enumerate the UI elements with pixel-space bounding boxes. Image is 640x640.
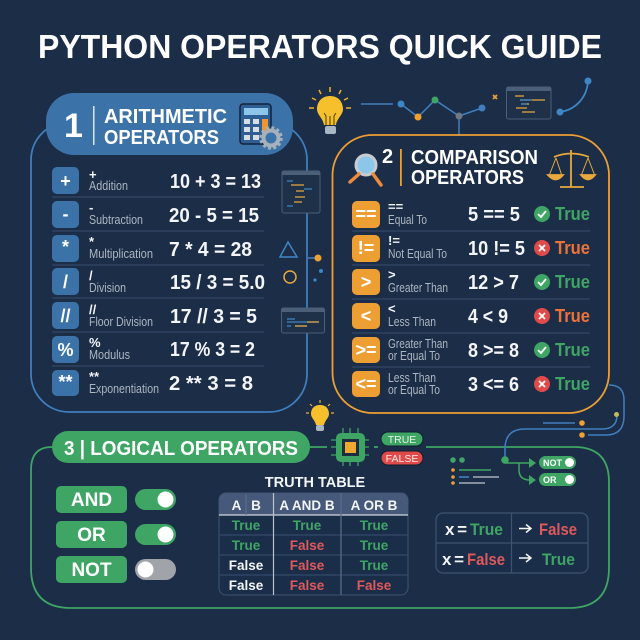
row: multiplication [52, 231, 264, 262]
row: exponentiation [52, 366, 264, 396]
row: modulus: Modulus [89, 347, 130, 362]
row: multiplication: Multiplication [89, 246, 153, 261]
arithmetic header [46, 93, 293, 155]
row: not equal: True [555, 238, 590, 258]
truth table: False [229, 578, 264, 593]
truth table: A OR B [351, 498, 398, 513]
row: less than: True [555, 306, 590, 326]
row: not equal [352, 231, 590, 262]
decorative code lines and circuit [450, 385, 624, 485]
toggle pill: NOT: NOT [543, 458, 562, 468]
row: addition: + [60, 171, 71, 191]
toggle pill: NOT [539, 456, 576, 469]
row: less than [352, 299, 590, 329]
row: less or equal [352, 367, 590, 397]
row: equal: == [388, 199, 404, 214]
row: exponentiation: Exponentiation [89, 381, 159, 396]
row: modulus: 17 % 3 = 2 [170, 339, 255, 361]
decorative shapes [280, 242, 323, 283]
truth table: A AND B [279, 498, 335, 513]
row: floor division [52, 298, 264, 329]
toggle: NOT [135, 559, 176, 580]
row: not equal: != [358, 238, 374, 258]
icon: code window top [506, 87, 551, 119]
row: addition: Addition [89, 178, 128, 193]
row: greater or equal: 8 >= 8 [468, 340, 519, 362]
row: division: / [89, 268, 93, 283]
toggle pill: OR: OR [543, 475, 557, 485]
row: greater than [352, 265, 590, 295]
row: not equal: Not Equal To [388, 246, 447, 261]
row: less or equal: or Equal To [388, 382, 440, 397]
row: greater or equal: or Equal To [388, 348, 440, 363]
title: PYTHON OPERATORS QUICK GUIDE [38, 28, 602, 65]
truth table: True [232, 538, 261, 553]
comparison heading [411, 147, 538, 189]
row: addition: 10 + 3 = 13 [170, 171, 261, 193]
badge: false: FALSE [386, 453, 418, 465]
badge: true: TRUE [388, 434, 416, 446]
icon: magnifying glass [350, 155, 381, 185]
row: multiplication: 7 * 4 = 28 [169, 239, 252, 261]
toggle: AND [135, 489, 176, 510]
button: OR: OR [77, 525, 106, 546]
arithmetic header: ARITHMETIC [104, 106, 227, 128]
NOT table: True [470, 520, 503, 539]
row: addition: + [89, 167, 97, 182]
row: exponentiation: 2 ** 3 = 8 [169, 373, 253, 395]
panel: logical operators [31, 428, 609, 608]
row: modulus: % [89, 335, 101, 350]
row: floor division: 17 // 3 = 5 [170, 306, 257, 328]
truth table: True [232, 518, 261, 533]
truth table: False [290, 578, 325, 593]
row: subtraction: - [89, 200, 93, 215]
row: floor division: // [60, 306, 71, 326]
row: equal: == [355, 204, 377, 224]
row: greater than: Greater Than [388, 280, 448, 295]
row: less than: < [388, 301, 396, 316]
NOT table: x = [442, 550, 464, 569]
NOT table: False [467, 550, 505, 569]
row: division: 15 / 3 = 5.0 [170, 272, 265, 294]
row: greater or equal: Greater Than [388, 336, 448, 351]
row: greater or equal [352, 333, 590, 363]
NOT table: x = [445, 520, 467, 539]
row: not equal: != [388, 233, 400, 248]
row: greater than: > [361, 272, 371, 292]
row: less or equal: Less Than [388, 370, 436, 385]
row: greater than: 12 > 7 [468, 272, 519, 294]
row: modulus: % [57, 340, 74, 360]
truth table: False [229, 558, 264, 573]
row: subtraction: 20 - 5 = 15 [169, 205, 259, 227]
truth table [219, 475, 408, 595]
row: greater than: True [555, 272, 590, 292]
row: floor division: Floor Division [89, 314, 153, 329]
button: NOT [56, 556, 127, 583]
row: subtraction [52, 197, 264, 228]
truth table: TRUTH TABLE [265, 475, 366, 491]
truth table: True [360, 518, 389, 533]
toggle: OR [135, 524, 176, 545]
truth table: False [357, 578, 392, 593]
row: equal: True [555, 204, 590, 224]
row: exponentiation: ** [58, 372, 73, 392]
truth table: False [290, 558, 325, 573]
row: greater or equal: >= [355, 340, 377, 360]
icon: code window left [282, 171, 320, 213]
row: division: Division [89, 280, 126, 295]
button: AND [56, 486, 127, 513]
badge: false [381, 451, 423, 465]
logical header: 3 | LOGICAL OPERATORS [64, 438, 298, 460]
row: floor division: // [89, 302, 97, 317]
row: less or equal: 3 <= 6 [468, 374, 519, 396]
row: less than: 4 < 9 [468, 306, 508, 328]
row: multiplication: * [62, 237, 69, 257]
truth table: True [293, 518, 322, 533]
row: division: / [63, 272, 68, 292]
arithmetic header: OPERATORS [104, 127, 219, 149]
button: OR [56, 521, 127, 548]
row: exponentiation: ** [89, 369, 100, 384]
row: division [52, 265, 265, 295]
NOT table: False [539, 520, 577, 539]
icon: light bulb [309, 87, 351, 134]
truth table: True [360, 558, 389, 573]
logical header [52, 431, 310, 463]
icon: code window lower left [282, 308, 324, 333]
row: less or equal: <= [355, 374, 377, 394]
truth table: A [232, 498, 242, 513]
row: greater or equal: True [555, 340, 590, 360]
decorative top network [361, 78, 592, 135]
row: multiplication: * [89, 234, 95, 249]
row: equal: Equal To [388, 212, 427, 227]
row: equal: 5 == 5 [468, 204, 520, 226]
truth table: B [251, 498, 261, 513]
badge: true [381, 432, 423, 446]
icon: chip [331, 428, 369, 466]
button: AND: AND [71, 490, 112, 511]
row: less than: Less Than [388, 314, 436, 329]
toggle pill: OR [539, 473, 576, 486]
panel: comparison operators: 2 [382, 146, 393, 168]
row: subtraction: - [62, 204, 68, 224]
row: not equal: 10 != 5 [468, 238, 525, 260]
row: equal [352, 199, 590, 228]
icon: calculator and gear [240, 104, 282, 148]
comparison heading: OPERATORS [411, 167, 524, 189]
comparison heading: COMPARISON [411, 147, 538, 169]
arithmetic header: 1 [64, 107, 83, 145]
button: NOT: NOT [71, 560, 112, 581]
row: greater than: > [388, 267, 396, 282]
row: less or equal: True [555, 374, 590, 394]
truth table: False [290, 538, 325, 553]
icon: small bulb [306, 400, 334, 431]
truth table: True [360, 538, 389, 553]
row: modulus [52, 332, 264, 363]
row: addition [52, 167, 261, 194]
panel: arithmetic operators [31, 93, 307, 412]
NOT table [436, 513, 588, 573]
row: less than: < [361, 306, 371, 326]
row: subtraction: Subtraction [89, 212, 143, 227]
icon: scales [548, 150, 595, 187]
panel: comparison operators [332, 135, 609, 413]
NOT table: True [542, 550, 575, 569]
